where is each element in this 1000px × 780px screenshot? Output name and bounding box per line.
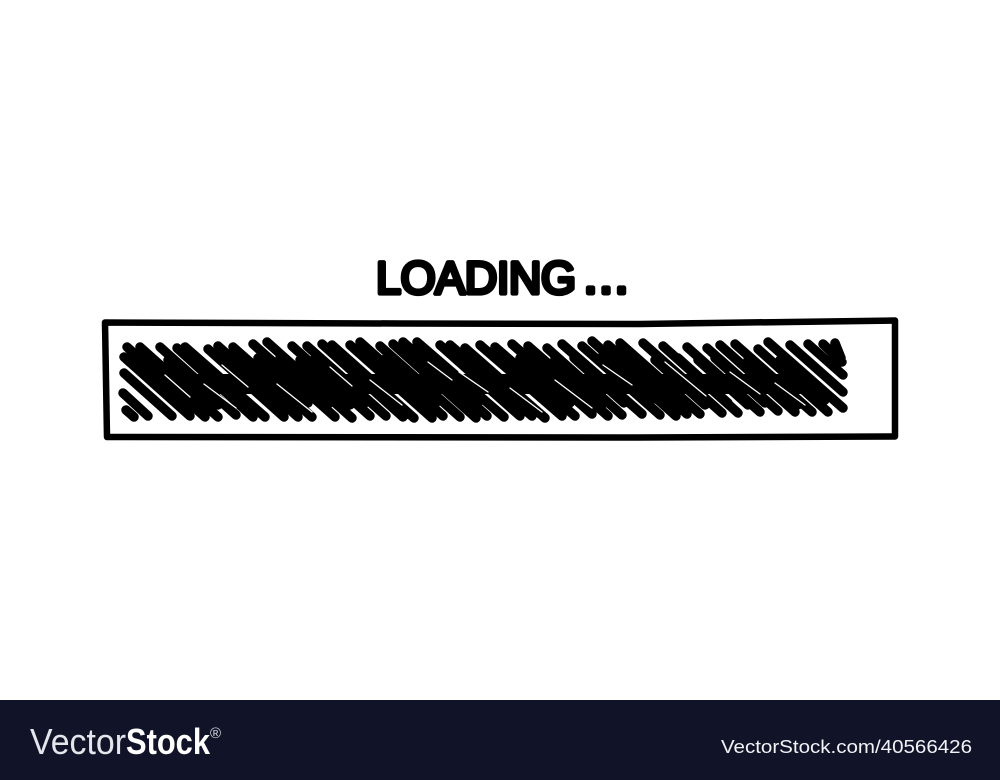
heading: LOADING...: LOADING [376, 252, 576, 304]
footer logo: VectorStock: Stock [126, 721, 211, 762]
footer bar [0, 700, 1000, 780]
scribble highlights [165, 362, 805, 412]
progress bar scribble fill [123, 341, 843, 418]
progress bar frame [105, 320, 895, 438]
scribble mid strokes [134, 358, 825, 405]
footer image id: VectorStock.com/40566426 [721, 737, 972, 757]
footer logo: VectorStock [30, 721, 221, 762]
heading: LOADING...: ... [584, 250, 628, 303]
footer logo: VectorStock: Vector [30, 721, 126, 762]
footer logo: VectorStock: ® [210, 725, 221, 742]
